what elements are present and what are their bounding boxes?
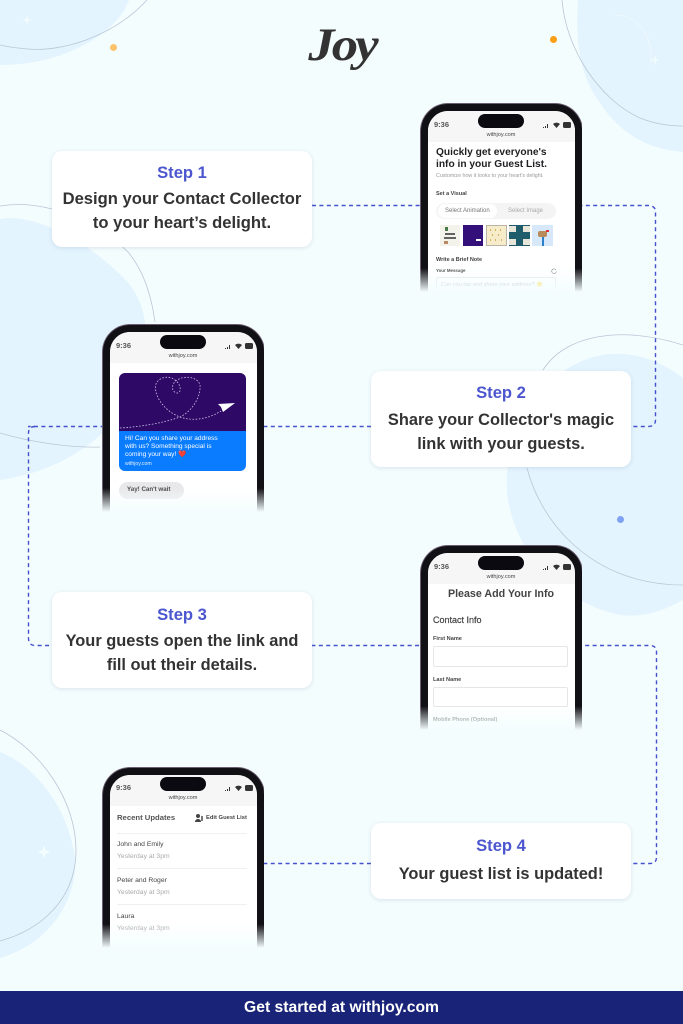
phone 4: recent updates list: Yesterday at 3pm bbox=[117, 925, 170, 932]
step 2 text: link with your guests. bbox=[417, 435, 585, 453]
step 1 text: Design your Contact Collector bbox=[63, 189, 301, 208]
phone 2: shared text message: Hi! Can you share your address bbox=[125, 435, 218, 442]
step 2 text: Share your Collector's magic bbox=[388, 411, 614, 429]
phone 4: recent updates list: 9:36 bbox=[116, 783, 131, 792]
phone 2: shared text message: with us? Something special is bbox=[125, 443, 212, 450]
panel: step 3 card bbox=[52, 592, 312, 688]
phone 2: shared text message: 9:36 bbox=[116, 341, 131, 350]
phone 1: contact collector design: Quickly get everyone's bbox=[436, 147, 547, 158]
phone 4: recent updates list: Yesterday at 3pm bbox=[117, 853, 170, 860]
step 4 text: Your guest list is updated! bbox=[399, 865, 603, 883]
phone 4: recent updates list bbox=[102, 767, 264, 947]
phone 4: recent updates list: Laura bbox=[117, 913, 134, 920]
panel: step 1 card bbox=[52, 151, 312, 247]
phone 1: contact collector design: Customize how it looks to your heart's delight. bbox=[436, 173, 544, 179]
phone 3: guest info form: withjoy.com bbox=[487, 574, 515, 580]
phone 4: recent updates list: Edit Guest List bbox=[206, 815, 247, 821]
panel: step 4 card bbox=[371, 823, 631, 899]
phone 1: contact collector design: Your Message bbox=[436, 268, 465, 273]
step 3 text: fill out their details. bbox=[107, 656, 257, 674]
step 1 text bbox=[63, 189, 302, 232]
phone 3: guest info form: Mobile Phone (Optional) bbox=[433, 717, 497, 723]
phone 4: recent updates list: withjoy.com bbox=[169, 795, 197, 801]
dot: orange bbox=[550, 36, 557, 43]
step 2 text bbox=[388, 411, 614, 453]
phone 4: recent updates list: Peter and Roger bbox=[117, 877, 167, 884]
phone 1: contact collector design: Write a Brief Note bbox=[436, 257, 482, 263]
step 4 heading: Step 4 bbox=[476, 836, 526, 855]
phone 2: shared text message: withjoy.com bbox=[125, 461, 152, 467]
phone 4: recent updates list: Recent Updates bbox=[117, 813, 175, 822]
phone 3: guest info form: Contact Info bbox=[433, 615, 482, 625]
phone 3: guest info form: Last Name bbox=[433, 677, 461, 683]
phone 3: guest info form bbox=[420, 545, 582, 729]
phone 3: guest info form: First Name bbox=[433, 636, 462, 642]
phone 1: contact collector design: 9:36 bbox=[434, 120, 449, 129]
step 3 heading: Step 3 bbox=[157, 605, 207, 624]
step 2 heading: Step 2 bbox=[476, 383, 526, 402]
phone 2: shared text message: Yay! Can't wait bbox=[127, 486, 170, 493]
phone 3: guest info form: Please Add Your Info bbox=[448, 588, 554, 600]
phone 3: guest info form: 9:36 bbox=[434, 562, 449, 571]
footer banner bbox=[0, 991, 683, 1024]
phone 4: recent updates list: Yesterday at 3pm bbox=[117, 889, 170, 896]
phone 1: contact collector design: Select Image bbox=[508, 208, 543, 214]
step 3 text bbox=[66, 632, 298, 674]
phone 1: contact collector design: Can you tap and share your address? 🌟 bbox=[441, 282, 543, 288]
step 3 text: Your guests open the link and bbox=[66, 632, 298, 650]
phone 1: contact collector design: info in your Guest List. bbox=[436, 159, 547, 170]
footer banner: Get started at withjoy.com bbox=[244, 999, 439, 1016]
phone 2: shared text message: coming your way! ❤️ bbox=[125, 451, 186, 458]
phone 1: contact collector design: Select Animation bbox=[445, 208, 490, 214]
phone 2: shared text message bbox=[102, 324, 264, 511]
panel: step 2 card bbox=[371, 371, 631, 467]
phone 1: contact collector design: withjoy.com bbox=[487, 132, 515, 138]
dot: pale orange bbox=[110, 44, 117, 51]
step 1 heading: Step 1 bbox=[157, 163, 207, 182]
logo: Joy: Joy bbox=[308, 19, 376, 71]
phone 1: contact collector design: Set a Visual bbox=[436, 191, 467, 197]
phone 2: shared text message: withjoy.com bbox=[169, 353, 197, 359]
phone 1: contact collector design bbox=[420, 103, 582, 291]
phone 4: recent updates list: John and Emily bbox=[117, 841, 163, 848]
step 1 text: to your heart’s delight. bbox=[93, 213, 271, 232]
dot: blue bbox=[617, 516, 624, 523]
